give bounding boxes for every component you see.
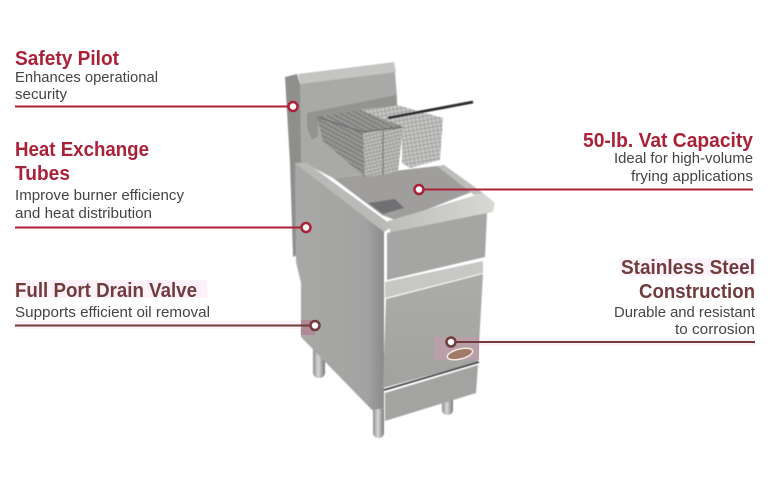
basket handle bbox=[388, 102, 473, 118]
deck left strip bbox=[295, 163, 393, 232]
description: Stainless Steel Construction: Durable and resistant bbox=[614, 304, 756, 321]
description: 50-lb. Vat Capacity: frying applications bbox=[631, 168, 753, 185]
leader line: Full Port Drain Valve bbox=[15, 321, 320, 330]
backsplash bbox=[300, 72, 398, 178]
vat surface bbox=[333, 166, 474, 221]
callout: Heat Exchange Tubes bbox=[15, 139, 310, 232]
heading: Heat Exchange Tubes bbox=[15, 139, 149, 185]
door panel bbox=[383, 274, 483, 388]
description: Full Port Drain Valve: Supports efficient oil removal bbox=[15, 304, 210, 321]
leader line: Heat Exchange Tubes bbox=[15, 223, 310, 232]
upper front panel bbox=[387, 213, 487, 280]
kick panel bbox=[385, 365, 478, 421]
heading: Full Port Drain Valve: Full Port Drain Valve bbox=[15, 280, 197, 302]
description: Stainless Steel Construction: to corrosion bbox=[675, 321, 755, 338]
description: Heat Exchange Tubes: and heat distribution bbox=[15, 205, 152, 222]
callout: Safety Pilot bbox=[15, 48, 298, 111]
heading: Heat Exchange Tubes: Tubes bbox=[15, 163, 70, 185]
callout: Full Port Drain Valve bbox=[15, 280, 320, 335]
callout: 50-lb. Vat Capacity bbox=[414, 130, 754, 194]
heading: 50-lb. Vat Capacity: 50-lb. Vat Capacity bbox=[583, 130, 754, 152]
highlight bbox=[434, 258, 756, 360]
heading: Heat Exchange Tubes: Heat Exchange bbox=[15, 139, 149, 161]
callout: Stainless Steel Construction bbox=[434, 257, 756, 362]
basket bracket bbox=[307, 95, 397, 140]
back riser side bbox=[285, 74, 308, 257]
description: 50-lb. Vat Capacity: Ideal for high-volume bbox=[614, 150, 753, 167]
side panel bbox=[295, 163, 384, 410]
description: Safety Pilot: security bbox=[15, 86, 67, 103]
shelf band bbox=[385, 261, 483, 298]
leader line: Safety Pilot bbox=[15, 102, 298, 111]
heading: Safety Pilot: Safety Pilot bbox=[15, 48, 119, 70]
heading: Stainless Steel Construction: Stainless Steel bbox=[621, 257, 755, 279]
front basket bbox=[317, 110, 403, 177]
description: Safety Pilot: Enhances operational bbox=[15, 69, 158, 86]
heading: Stainless Steel Construction bbox=[621, 257, 755, 303]
description: 50-lb. Vat Capacity bbox=[614, 150, 753, 185]
drain grate bbox=[368, 199, 404, 214]
vat rear lip bbox=[437, 165, 483, 195]
top rim bbox=[388, 193, 495, 235]
description: Stainless Steel Construction bbox=[614, 304, 756, 338]
leader line: 50-lb. Vat Capacity bbox=[414, 185, 753, 194]
fryer illustration bbox=[285, 62, 495, 438]
description: Heat Exchange Tubes bbox=[15, 187, 184, 222]
leader line: Stainless Steel Construction bbox=[446, 338, 755, 346]
brand badge bbox=[446, 346, 474, 362]
fryer legs bbox=[313, 345, 453, 438]
description: Heat Exchange Tubes: Improve burner efficiency bbox=[15, 187, 184, 204]
description: Safety Pilot bbox=[15, 69, 158, 103]
heading: Stainless Steel Construction: Construction bbox=[639, 281, 755, 303]
rear basket bbox=[360, 105, 443, 168]
highlight bbox=[15, 280, 315, 335]
